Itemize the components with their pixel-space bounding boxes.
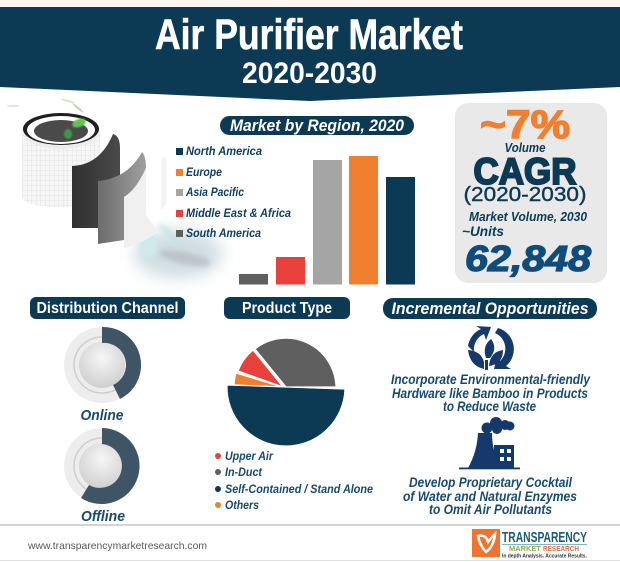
logo: Transparency Market Research: In depth Analysis. Accurate Results.	[502, 554, 587, 560]
legend: regions: North America	[186, 144, 262, 158]
panel: CAGR stats: ~Units	[462, 223, 504, 239]
logo: Transparency Market Research: MARKET	[509, 544, 541, 553]
legend: product type: Upper Air	[225, 449, 274, 463]
panel: CAGR stats: 62,848	[465, 238, 591, 279]
bar chart: market by region	[239, 156, 415, 284]
panel: CAGR stats: Volume	[504, 140, 546, 155]
panel: CAGR stats: Market Volume, 2030	[469, 209, 588, 224]
header banner	[0, 7, 620, 101]
text: enzyme cocktail opportunity: Develop Proprietary Cocktail	[409, 474, 573, 490]
logo: Transparency Market Research: TRANSPARENCY	[502, 530, 587, 546]
panel: CAGR stats: ~7%	[480, 103, 570, 147]
text: enzyme cocktail opportunity: to Omit Air Pollutants	[429, 501, 552, 517]
legend: regions	[176, 144, 291, 240]
title: Air Purifier Market	[155, 11, 463, 59]
heading: Market by Region: Market by Region, 2020	[230, 116, 404, 135]
legend: regions: South America	[186, 226, 261, 240]
icon: recycling leaf	[468, 326, 514, 370]
panel: CAGR stats: CAGR	[474, 151, 576, 192]
text: bamboo hardware opportunity: Hardware like Bamboo in Products	[392, 385, 588, 401]
heading: Product Type: Product Type	[242, 300, 332, 317]
legend: product type: In-Duct	[225, 465, 263, 479]
icon: factory with smoke	[459, 417, 520, 469]
text: enzyme cocktail opportunity	[403, 474, 577, 517]
legend: regions: Europe	[186, 165, 222, 179]
heading: Incremental Opportunities: Incremental Opportunities	[392, 299, 588, 318]
filter cylinder	[22, 113, 100, 207]
legend: regions: Middle East & Africa	[186, 206, 291, 220]
grey mesh layer	[98, 152, 146, 244]
mist cloud	[134, 226, 222, 278]
carbon filter layer	[72, 134, 120, 228]
legend: product type: Others	[225, 498, 259, 512]
legend: product type	[215, 449, 373, 512]
leaves	[7, 98, 87, 139]
pie chart: product type	[227, 338, 345, 446]
text: enzyme cocktail opportunity: of Water and Natural Enzymes	[403, 488, 577, 504]
legend: regions: Asia Pacific	[185, 185, 244, 199]
text: bamboo hardware opportunity	[391, 371, 591, 414]
label: Online: Online	[80, 407, 124, 424]
logo: Transparency Market Research	[472, 529, 587, 560]
label: Offline: Offline	[81, 508, 125, 525]
heading: Product Type	[224, 297, 350, 319]
text: bamboo hardware opportunity: to Reduce Waste	[443, 398, 536, 414]
website url: www.transparencymarketresearch.com	[27, 540, 207, 552]
illustration: air purifier filter	[7, 98, 222, 278]
logo: Transparency Market Research: RESEARCH	[543, 544, 579, 553]
panel: CAGR stats	[455, 103, 607, 283]
legend: product type: Self-Contained / Stand Alone	[225, 482, 373, 496]
heading: Distribution Channel: Distribution Channel	[36, 300, 178, 317]
donut: offline	[64, 428, 140, 504]
donut: online	[64, 327, 141, 403]
subtitle: 2020-2030	[242, 57, 377, 90]
panel: CAGR stats: (2020-2030)	[464, 184, 586, 206]
text: bamboo hardware opportunity: Incorporate Environmental-friendly	[391, 371, 591, 387]
pale filter layers	[124, 168, 158, 248]
